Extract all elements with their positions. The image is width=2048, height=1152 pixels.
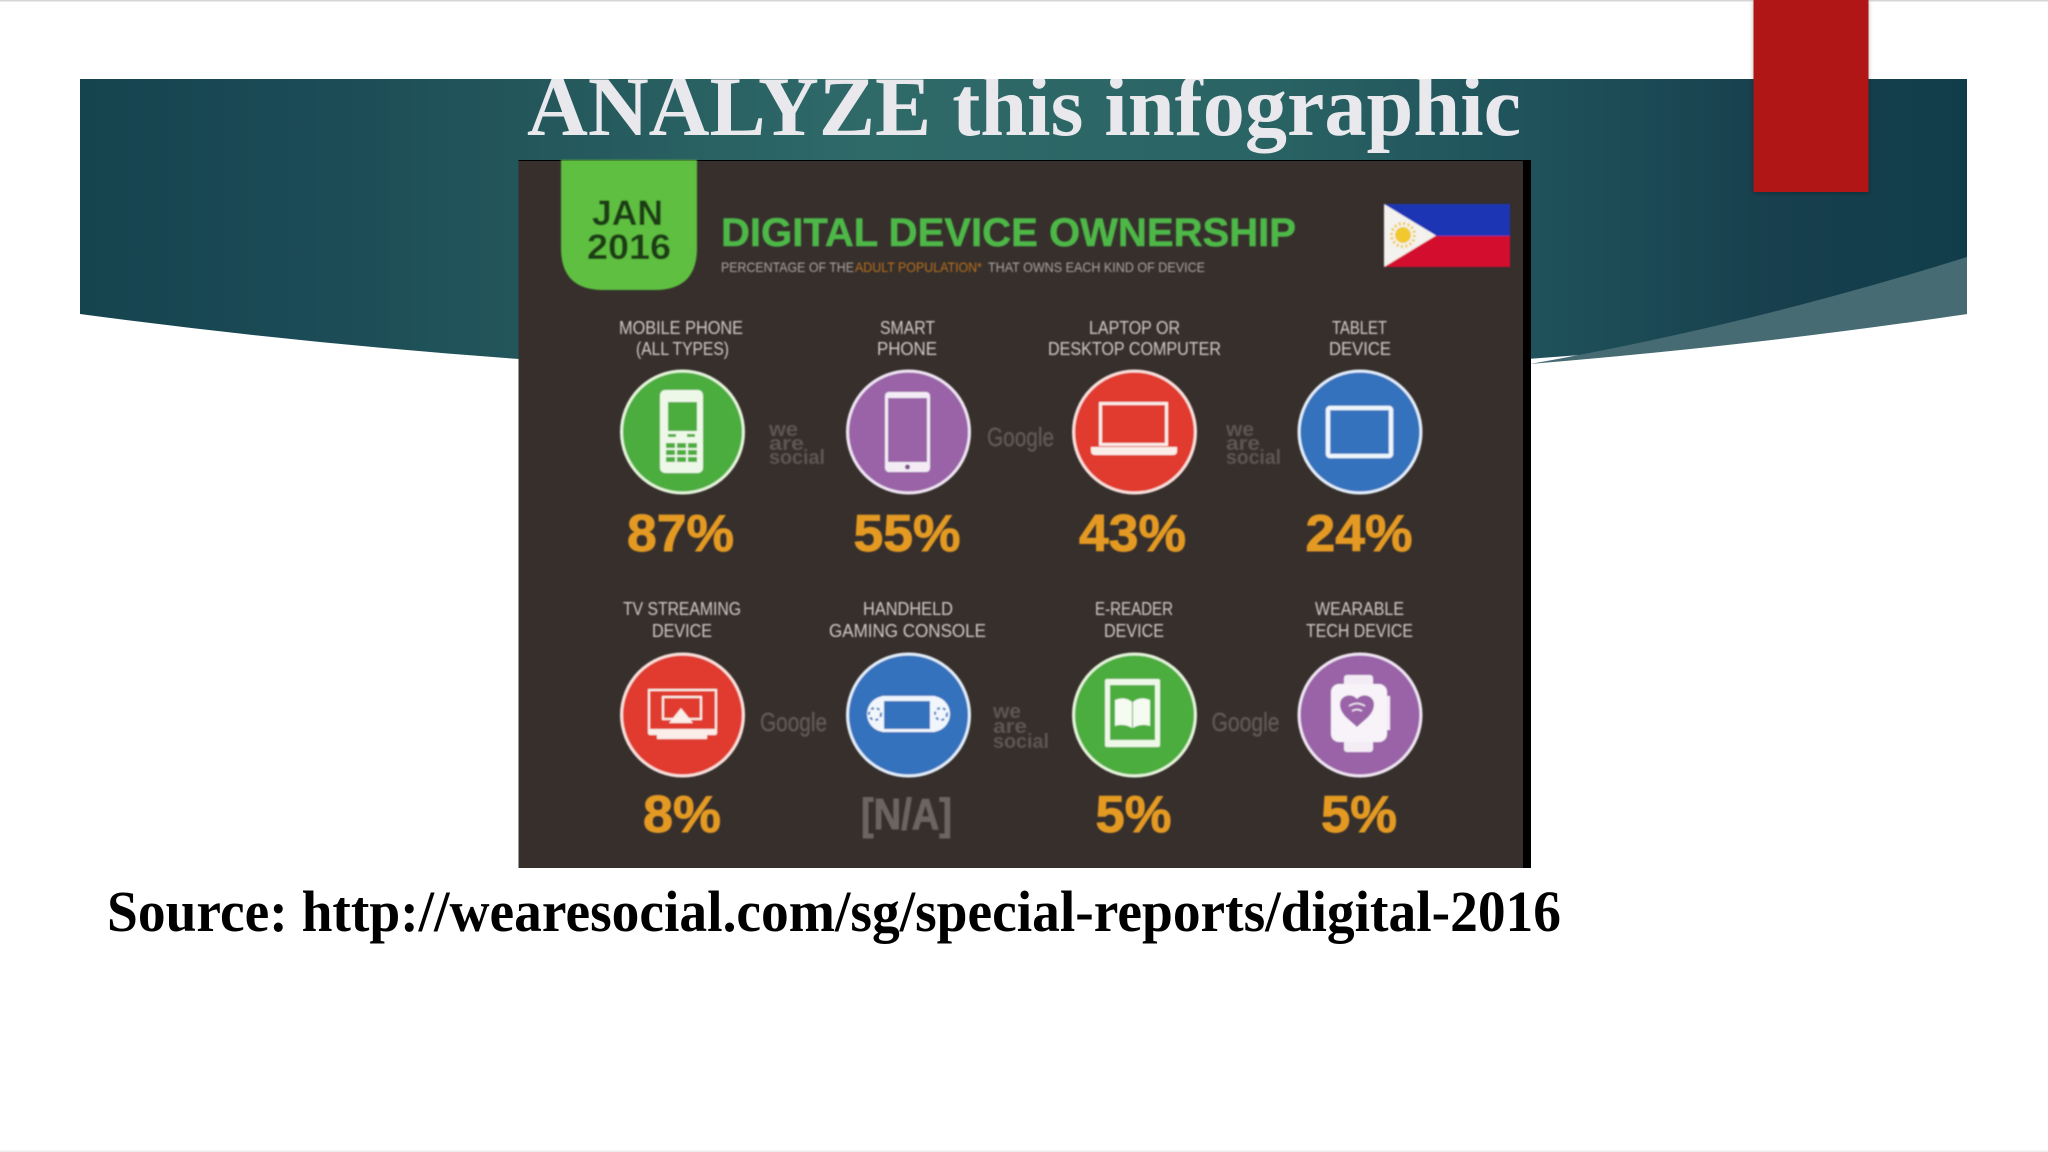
item: smart phone xyxy=(848,318,970,563)
label xyxy=(623,599,741,641)
label: DEVICE xyxy=(1329,339,1391,359)
item: e-reader device xyxy=(1074,599,1196,844)
source line: Source: http://wearesocial.com/sg/special-reports/digital-2016 xyxy=(107,879,1561,944)
watermark: Google xyxy=(760,707,827,737)
icon: gaming console xyxy=(867,696,950,732)
icon: smart phone xyxy=(885,392,930,472)
item: laptop or desktop computer xyxy=(1048,318,1221,563)
circle xyxy=(848,654,970,776)
label xyxy=(1048,318,1221,359)
watermark: we xyxy=(768,419,798,441)
label xyxy=(829,599,986,641)
label xyxy=(619,318,743,359)
watermark xyxy=(1225,419,1281,469)
icon: tablet xyxy=(1328,408,1391,456)
watermark: are xyxy=(769,433,804,455)
title: ANALYZE this infographic xyxy=(527,60,1521,154)
watermark: social xyxy=(1226,447,1281,469)
item: tablet device xyxy=(1299,318,1421,563)
value: 8% xyxy=(643,786,721,844)
panel heading: DIGITAL DEVICE OWNERSHIP xyxy=(721,211,1296,255)
watermark: social xyxy=(769,447,825,469)
circle xyxy=(848,371,970,493)
watermark: Google xyxy=(1212,707,1280,737)
value: 43% xyxy=(1079,505,1186,563)
panel: digital device ownership infographic xyxy=(518,160,1531,868)
date tab: 2016 xyxy=(587,228,671,267)
date tab xyxy=(561,160,697,290)
value: [N/A] xyxy=(861,790,952,839)
icon: Philippine flag xyxy=(1384,204,1510,267)
band light sliver xyxy=(1530,257,1967,364)
item: TV streaming device xyxy=(622,599,744,844)
value: 87% xyxy=(627,505,734,563)
value: 24% xyxy=(1306,505,1412,563)
panel subheading xyxy=(721,259,1205,275)
red ribbon xyxy=(1754,0,1868,192)
circle xyxy=(622,371,744,493)
panel background xyxy=(518,160,1531,868)
value: 5% xyxy=(1321,786,1397,844)
label: E-READER xyxy=(1095,599,1173,619)
value: 55% xyxy=(854,505,960,563)
label: SMART xyxy=(880,318,935,338)
label: LAPTOP OR xyxy=(1089,318,1180,338)
icon: smart watch xyxy=(1331,675,1390,752)
icon: laptop xyxy=(1091,404,1177,455)
watermark: social xyxy=(993,731,1049,753)
label xyxy=(1329,318,1391,359)
label: TABLET xyxy=(1332,318,1387,338)
value: 5% xyxy=(1096,786,1172,844)
watermark: we xyxy=(1225,419,1254,441)
circle xyxy=(622,654,744,776)
label: TV STREAMING xyxy=(623,599,741,619)
label xyxy=(877,318,937,359)
watermark: are xyxy=(993,716,1027,738)
label: PHONE xyxy=(877,339,937,359)
label: MOBILE PHONE xyxy=(619,318,743,338)
circle xyxy=(1299,654,1421,776)
label: DESKTOP COMPUTER xyxy=(1048,339,1221,359)
watermark: are xyxy=(1226,433,1260,455)
watermark: Google xyxy=(987,422,1054,452)
item: wearable tech device xyxy=(1299,599,1421,844)
label: HANDHELD xyxy=(863,599,953,619)
date tab: JAN xyxy=(592,194,663,233)
circle xyxy=(1299,371,1421,493)
header band xyxy=(80,79,1967,377)
label: (ALL TYPES) xyxy=(636,339,729,359)
label: TECH DEVICE xyxy=(1306,621,1413,641)
label xyxy=(1095,599,1173,641)
label: GAMING CONSOLE xyxy=(829,621,986,641)
icon: TV xyxy=(649,690,716,739)
item: handheld gaming console xyxy=(829,599,986,839)
circle xyxy=(1074,654,1196,776)
circle xyxy=(1074,371,1196,493)
panel subheading: ADULT POPULATION* xyxy=(855,259,982,275)
watermark xyxy=(768,419,825,469)
panel subheading: THAT OWNS EACH KIND OF DEVICE xyxy=(988,259,1205,275)
watermark: we xyxy=(992,701,1021,723)
item: mobile phone xyxy=(619,318,744,563)
icon: e-reader xyxy=(1105,679,1160,747)
watermark xyxy=(992,701,1049,753)
panel subheading: PERCENTAGE OF THE xyxy=(721,259,854,275)
label: WEARABLE xyxy=(1315,599,1404,619)
label: DEVICE xyxy=(652,621,712,641)
label xyxy=(1306,599,1413,641)
label: DEVICE xyxy=(1104,621,1164,641)
icon: mobile phone xyxy=(660,390,703,473)
